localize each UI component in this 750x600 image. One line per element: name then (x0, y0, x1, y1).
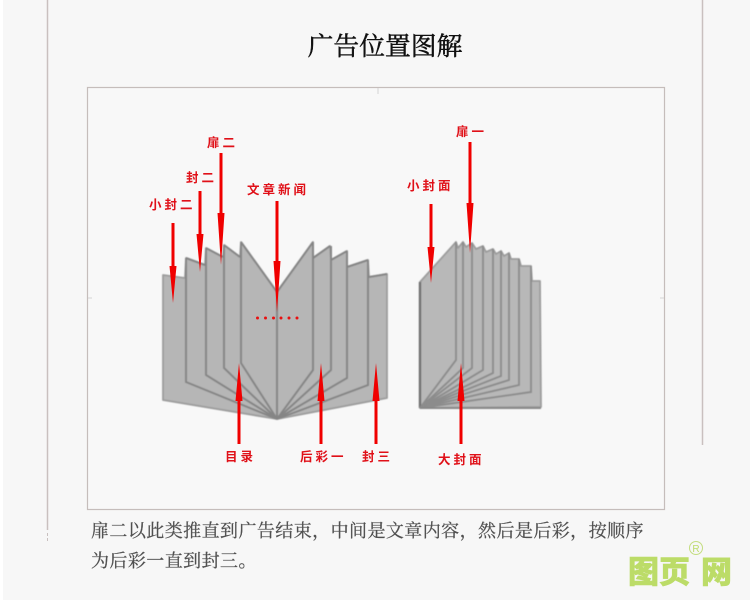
arrow: 小封面 (428, 204, 434, 283)
labels: 后彩一 (300, 449, 347, 464)
arrow: 扉二 (218, 153, 224, 265)
caption text: 为后彩一直到封三。 (91, 551, 257, 571)
arrow: 大封面 (458, 363, 464, 444)
logo: 网 (701, 555, 732, 590)
dotted line (256, 316, 298, 320)
diagram frame (88, 88, 664, 510)
labels: 文章新闻 (247, 182, 309, 197)
left book diagram (163, 242, 387, 419)
labels: 封三 (362, 449, 393, 464)
labels: 扉一 (456, 124, 487, 139)
labels: 封二 (186, 170, 217, 185)
labels: 扉二 (207, 135, 238, 150)
arrow: 目录 (236, 363, 242, 444)
left book fold lines (186, 242, 387, 419)
arrow: 扉一 (466, 142, 474, 253)
logo (628, 542, 732, 590)
labels: 大封面 (438, 452, 485, 467)
right book fold lines (420, 242, 541, 408)
labels: 小封二 (149, 197, 196, 212)
right book diagram (420, 242, 541, 408)
arrow: 小封二 (170, 223, 176, 303)
registered mark: R (692, 544, 700, 555)
arrow: 封三 (372, 363, 380, 444)
title: 广告位置图解 (308, 32, 463, 61)
labels: 目录 (225, 450, 256, 464)
arrow: 封二 (196, 191, 204, 272)
right book pages (420, 242, 541, 408)
arrow: 后彩一 (318, 363, 324, 444)
labels: 小封面 (407, 178, 454, 193)
labels (149, 124, 487, 467)
logo: 图页 (628, 555, 690, 590)
caption text: 扉二以此类推直到广告结束，中间是文章内容，然后是后彩，按顺序 (91, 521, 644, 541)
arrow: 文章新闻 (274, 201, 280, 312)
caption text (91, 521, 644, 571)
left book pages (163, 242, 387, 419)
page border lines (48, 0, 702, 541)
arrows (170, 142, 474, 444)
